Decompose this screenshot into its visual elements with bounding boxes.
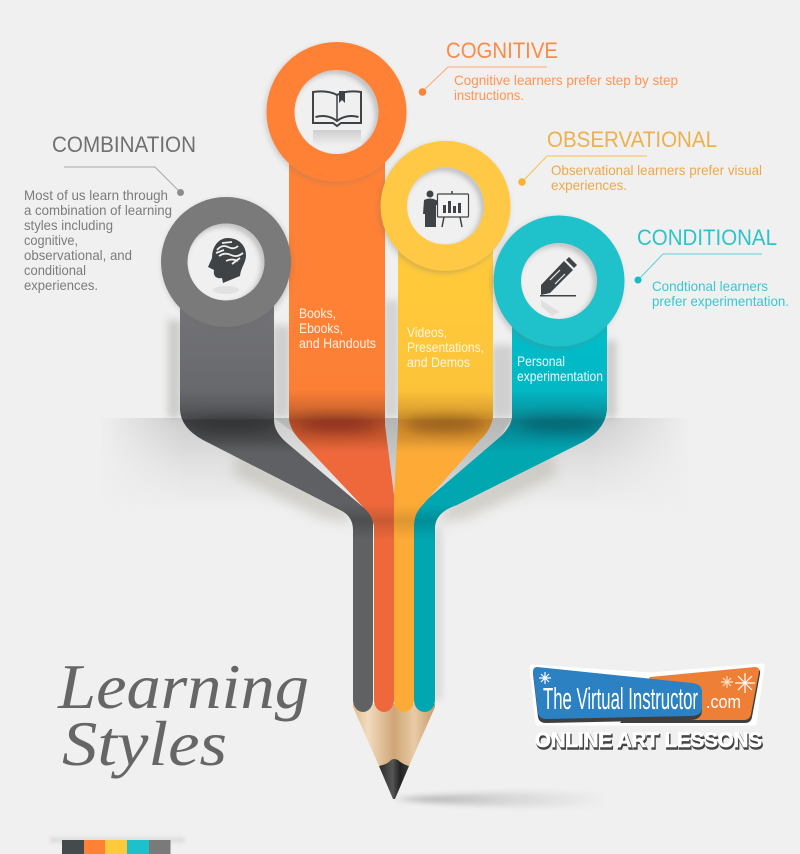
heading: conditional: CONDITIONAL — [637, 225, 777, 250]
wood cone — [353, 704, 435, 770]
logo domain: .com — [706, 692, 741, 712]
ribbon label: conditional — [517, 353, 603, 384]
title: Learning — [57, 651, 309, 722]
logo stars — [539, 672, 755, 693]
circle: observational — [379, 141, 510, 273]
logo tagline: ONLINE ART LESSONS — [536, 731, 763, 754]
ribbon: conditional (teal) — [414, 300, 607, 712]
text: combination description — [24, 187, 172, 293]
ribbon label: observational: and Demos — [407, 354, 470, 370]
text: conditional description — [652, 278, 789, 309]
text: cognitive description: instructions. — [454, 87, 524, 103]
heading: observational: OBSERVATIONAL — [547, 127, 717, 152]
title — [57, 651, 309, 779]
text: combination description: a combination of learning — [24, 202, 172, 218]
text: conditional description: prefer experimentation. — [652, 293, 789, 309]
icon: open book — [313, 91, 361, 146]
callout: conditional — [634, 225, 789, 309]
gaps between ribbons below the fold — [274, 418, 512, 515]
ribbon label: observational: Presentations, — [407, 339, 484, 355]
ribbon: combination (gray) — [180, 300, 373, 712]
icon: presenter and chart — [423, 190, 468, 227]
icon: pencil — [540, 257, 577, 316]
text: observational description: experiences. — [551, 177, 627, 193]
text: observational description: Observational learners prefer visual — [551, 162, 762, 178]
heading: combination: COMBINATION — [52, 132, 196, 157]
contact shadows beside ribbons — [168, 300, 616, 700]
leader line: conditional — [634, 254, 762, 284]
heading: cognitive: COGNITIVE — [446, 38, 558, 63]
callout: combination — [24, 132, 196, 293]
circle: cognitive — [265, 42, 406, 184]
ribbon label: observational — [407, 324, 484, 370]
logo badge — [532, 666, 762, 723]
text: combination description: cognitive, — [24, 232, 78, 248]
leader line: observational — [518, 156, 647, 186]
text: combination description: experiences. — [24, 277, 98, 293]
logo tagline: ONLINE ART LESSONS — [535, 729, 762, 752]
ribbon: cognitive (orange) — [289, 162, 394, 712]
logo: The Virtual Instructor — [532, 666, 763, 754]
text: cognitive description — [454, 72, 678, 103]
text: combination description: conditional — [24, 262, 86, 278]
ribbon label: conditional: Personal — [517, 353, 565, 369]
pencil shadow — [394, 792, 610, 807]
ribbon label: conditional: experimentation — [517, 368, 603, 384]
ribbon label: cognitive — [299, 305, 376, 351]
callout: cognitive — [419, 38, 678, 103]
circle: combination — [161, 197, 292, 329]
text: combination description: Most of us learn through — [24, 187, 168, 203]
ribbon label: cognitive: and Handouts — [299, 335, 376, 351]
text: cognitive description: Cognitive learners prefer step by step — [454, 72, 678, 88]
lead tip — [379, 759, 409, 799]
circle: conditional — [492, 216, 624, 348]
text: combination description: observational, and — [24, 247, 132, 263]
leader line: combination — [64, 167, 184, 196]
ribbon: observational (yellow) — [394, 200, 493, 712]
fold shadow on the ground — [118, 418, 668, 484]
colour legend strip — [50, 838, 185, 854]
text: observational description — [551, 162, 762, 193]
text: conditional description: Condtional learners — [652, 278, 768, 294]
icon: head with brain — [208, 238, 246, 294]
ribbon label: cognitive: Ebooks, — [299, 320, 343, 336]
pencil point — [353, 704, 610, 807]
title: Styles — [62, 708, 227, 779]
leader line: cognitive — [419, 67, 547, 96]
ribbon label: cognitive: Books, — [299, 305, 336, 321]
text: combination description: styles including — [24, 217, 113, 233]
callout: observational — [518, 127, 762, 193]
ribbon label: observational: Videos, — [407, 324, 447, 340]
